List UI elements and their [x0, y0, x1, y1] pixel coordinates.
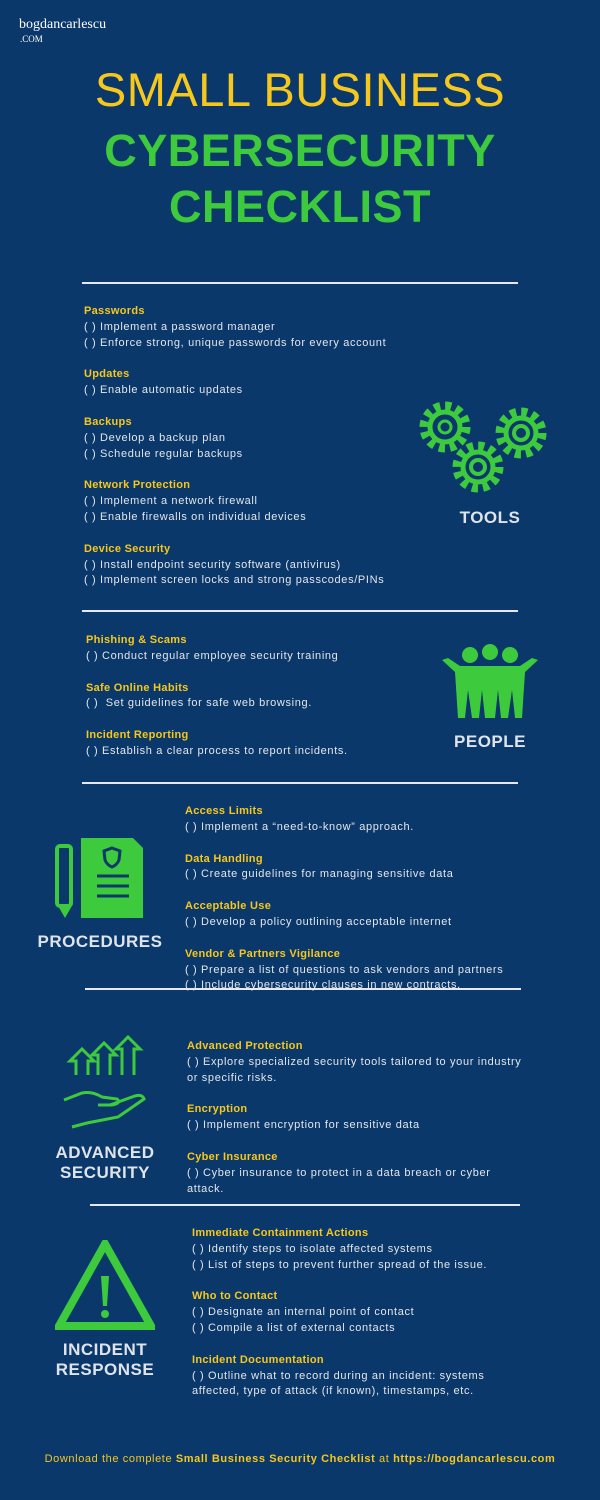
label: advanced security: SECURITY	[60, 1163, 150, 1182]
label: incident response	[56, 1340, 154, 1379]
panel: tools checklist: Passwords	[84, 305, 145, 317]
panel: incident response checklist: Who to Contact	[192, 1290, 277, 1302]
label: tools: TOOLS	[460, 508, 520, 527]
label: advanced security: ADVANCED	[55, 1143, 155, 1162]
panel: tools checklist	[84, 305, 386, 586]
panel: incident response checklist: affected, type of attack (if known), timestamps, etc.	[192, 1385, 474, 1397]
panel: tools checklist: ( ) Implement screen locks and strong passcodes/PINs	[84, 574, 384, 586]
panel: procedures checklist: Access Limits	[185, 805, 263, 817]
icon: hand with arrows	[64, 1035, 146, 1128]
panel: incident response checklist: ( ) Identify steps to isolate affected systems	[192, 1243, 433, 1255]
panel: tools checklist: Updates	[84, 368, 130, 380]
panel: advanced security checklist: Advanced Protection	[187, 1040, 303, 1052]
panel: procedures checklist: Acceptable Use	[185, 900, 271, 912]
panel: tools checklist: ( ) Schedule regular backups ( ) Implement a network firewall	[84, 448, 258, 507]
panel: people checklist: Phishing & Scams	[86, 634, 187, 646]
panel: incident response checklist	[192, 1227, 487, 1397]
panel: incident response checklist: ( ) List of steps to prevent further spread of the issue. ( ) Designate an internal point of contact	[192, 1259, 487, 1318]
panel: people checklist: Safe Online Habits	[86, 682, 189, 694]
panel: tools checklist: Device Security	[84, 543, 170, 555]
panel: advanced security checklist: Encryption	[187, 1103, 247, 1115]
panel: incident response checklist: Incident Documentation	[192, 1354, 324, 1366]
title	[95, 63, 505, 232]
footer: Download the complete Small Business Security Checklist at https://bogdancarlescu.com	[45, 1453, 555, 1465]
label: incident response: INCIDENT	[63, 1340, 147, 1359]
panel: people checklist: Incident Reporting	[86, 729, 189, 741]
logo: bogdancarlescu	[19, 17, 106, 32]
title: CHECKLIST	[169, 181, 431, 232]
logo: .COM	[20, 34, 43, 44]
label: procedures: PROCEDURES	[38, 932, 162, 951]
icon: gears	[420, 402, 546, 492]
panel: procedures checklist: ( ) Implement a “need-to-know” approach. ( ) Create guidelines for managing sensitive data ( ) Develop a policy outlining acceptable internet ( ) Prepare a list of questions to ask vendors and partners	[185, 821, 503, 976]
panel: incident response checklist: ( ) Compile a list of external contacts ( ) Outline what to record during an incident: systems	[192, 1322, 484, 1382]
icon: people	[442, 644, 538, 718]
panel: advanced security checklist: ( ) Explore specialized security tools tailored to your industry	[187, 1056, 521, 1068]
panel: procedures checklist: ( ) Include cybersecurity clauses in new contracts.	[185, 979, 461, 991]
icon: document and pen	[55, 838, 143, 918]
panel: advanced security checklist: or specific risks. ( ) Implement encryption for sensitive data ( ) Cyber insurance to protect in a data breach or cyber	[187, 1072, 491, 1179]
panel: procedures checklist: Vendor & Partners Vigilance	[185, 948, 340, 960]
panel: tools checklist: ( ) Enforce strong, unique passwords for every account ( ) Enable automatic updates ( ) Develop a backup plan	[84, 337, 386, 444]
panel: incident response checklist: Immediate Containment Actions	[192, 1227, 368, 1239]
title: SMALL BUSINESS	[95, 63, 505, 116]
label: incident response: RESPONSE	[56, 1360, 154, 1379]
label: advanced security	[55, 1143, 155, 1182]
panel: tools checklist: ( ) Implement a password manager	[84, 321, 275, 333]
logo	[19, 17, 106, 44]
panel: tools checklist: ( ) Enable firewalls on individual devices ( ) Install endpoint security software (antivirus)	[84, 511, 341, 571]
title: CYBERSECURITY	[104, 125, 496, 176]
panel: tools checklist: Backups	[84, 416, 132, 428]
panel: advanced security checklist: attack.	[187, 1183, 224, 1195]
panel: procedures checklist: Data Handling	[185, 853, 263, 865]
panel: people checklist: ( ) Conduct regular employee security training ( ) Set guidelines for safe web browsing. ( ) Establish a clear process to report incidents.	[86, 650, 348, 757]
label: people: PEOPLE	[454, 732, 526, 751]
icon: warning triangle	[55, 1240, 155, 1330]
panel: advanced security checklist	[187, 1040, 521, 1195]
panel: tools checklist: Network Protection	[84, 479, 190, 491]
panel: advanced security checklist: Cyber Insurance	[187, 1151, 278, 1163]
